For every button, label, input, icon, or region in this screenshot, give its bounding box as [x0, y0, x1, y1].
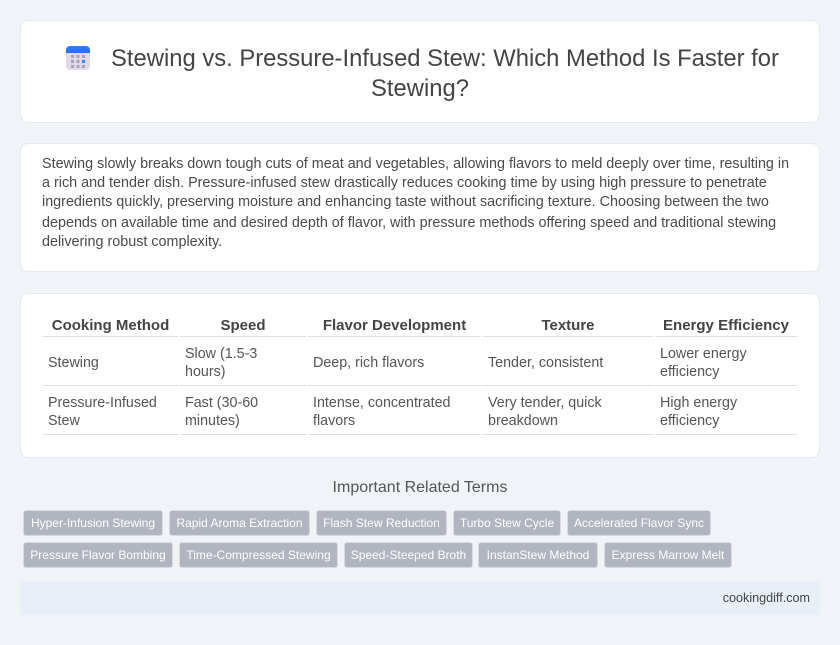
related terms tags [23, 510, 732, 568]
comparison table: Texture [541, 316, 595, 334]
comparison table: Fast (30-60 [185, 395, 258, 411]
footer bar [20, 581, 820, 615]
icon: calendar [66, 46, 90, 70]
summary text: delivering robust complexity. [42, 234, 222, 250]
comparison table: Lower energy [660, 346, 747, 362]
comparison table: flavors [313, 413, 355, 429]
related terms tags: Rapid Aroma Extraction [176, 516, 303, 530]
summary card [20, 143, 820, 272]
related terms heading: Important Related Terms [333, 479, 507, 496]
summary text: depends on available time and desired depth of flavor, with pressure methods offering speed and traditional stewing [42, 214, 776, 230]
comparison table: Tender, consistent [488, 355, 603, 371]
related terms tags: Turbo Stew Cycle [460, 516, 554, 530]
comparison table: efficiency [660, 413, 719, 429]
comparison table: Energy Efficiency [663, 316, 789, 334]
comparison table: efficiency [660, 364, 719, 380]
summary text: a rich and tender dish. Pressure-infused stew drastically reduces cooking time by using high pressure to penetrate [42, 174, 767, 190]
related terms tags: Flash Stew Reduction [323, 516, 440, 530]
comparison table: Stewing [48, 355, 99, 371]
related terms tags: Speed-Steeped Broth [351, 548, 466, 562]
comparison table: Deep, rich flavors [313, 355, 424, 371]
summary text [42, 156, 789, 250]
summary text: Stewing slowly breaks down tough cuts of meat and vegetables, allowing flavors to meld deeply over time, resulting in [42, 156, 789, 172]
comparison table: Intense, concentrated [313, 395, 451, 411]
comparison table: minutes) [185, 413, 240, 429]
header card [20, 20, 820, 123]
table card [20, 293, 820, 458]
text: Stewing vs. Pressure-Infused Stew: Which Method Is Faster for [111, 45, 779, 72]
text: Stewing? [371, 75, 469, 102]
comparison table: breakdown [488, 413, 558, 429]
comparison table: High energy [660, 395, 737, 411]
comparison table: hours) [185, 364, 226, 380]
related terms tags: Hyper-Infusion Stewing [31, 516, 155, 530]
related terms tags: Accelerated Flavor Sync [574, 516, 704, 530]
comparison table: Pressure-Infused [48, 395, 157, 411]
comparison table: Slow (1.5-3 [185, 346, 257, 362]
comparison table: Flavor Development [323, 316, 466, 334]
related terms tags: Express Marrow Melt [612, 548, 724, 562]
comparison table: Cooking Method [52, 316, 169, 334]
title [111, 45, 779, 102]
comparison table: Very tender, quick [488, 395, 602, 411]
comparison table: Speed [220, 316, 266, 334]
summary text: ingredients quickly, preserving moisture and enhancing taste without sacrificing texture. Choosing between the two [42, 194, 769, 210]
related terms tags: InstanStew Method [487, 548, 589, 562]
related terms tags: Time-Compressed Stewing [186, 548, 331, 562]
related terms tags: Pressure Flavor Bombing [30, 548, 166, 562]
comparison table: Stew [48, 413, 80, 429]
footer source: cookingdiff.com [723, 591, 810, 605]
comparison table [43, 316, 797, 435]
